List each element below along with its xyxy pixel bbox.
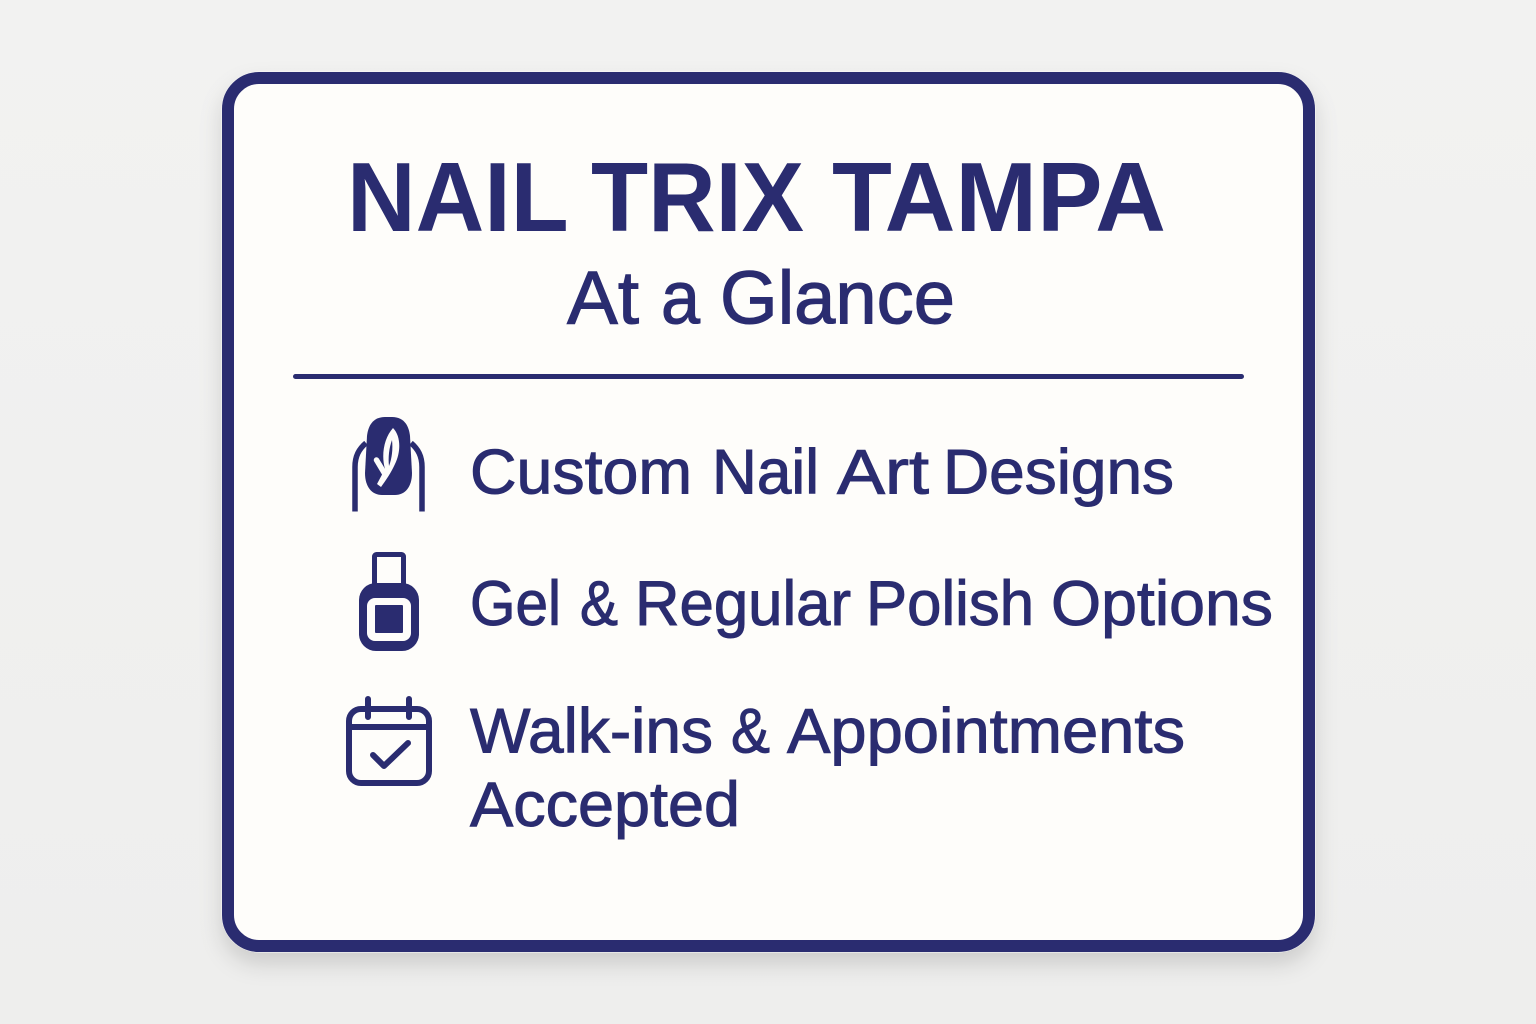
feature text: polish options: Options xyxy=(1051,569,1273,639)
title: NAIL xyxy=(347,142,567,252)
feature text: polish options: & xyxy=(580,569,618,639)
feature text: nail art: Custom xyxy=(470,438,692,508)
title: TAMPA xyxy=(832,142,1166,252)
divider xyxy=(293,374,1244,379)
subtitle: a xyxy=(661,256,700,340)
feature text: walk-ins and appointments: & xyxy=(731,696,770,766)
feature text: walk-ins and appointments: Walk-ins xyxy=(470,696,713,766)
feature text: polish options: Polish xyxy=(866,569,1034,639)
icon: nail with leaf art xyxy=(355,417,422,512)
feature text: nail art: Nail xyxy=(712,438,819,508)
feature text: walk-ins and appointments: Accepted xyxy=(470,770,740,840)
feature text: walk-ins and appointments: Appointments xyxy=(787,696,1185,766)
subtitle: At xyxy=(567,256,639,340)
feature text: nail art: Art xyxy=(837,438,930,508)
title: TRIX xyxy=(591,142,804,252)
icon: calendar with check xyxy=(349,699,429,783)
feature text: polish options: Gel xyxy=(470,569,561,639)
feature text: nail art: Designs xyxy=(943,438,1174,508)
subtitle: Glance xyxy=(720,256,955,340)
feature text: walk-ins and appointments xyxy=(470,696,1185,840)
icon: polish bottle xyxy=(359,554,419,651)
panel: card xyxy=(222,72,1316,952)
feature text: polish options: Regular xyxy=(635,569,851,639)
